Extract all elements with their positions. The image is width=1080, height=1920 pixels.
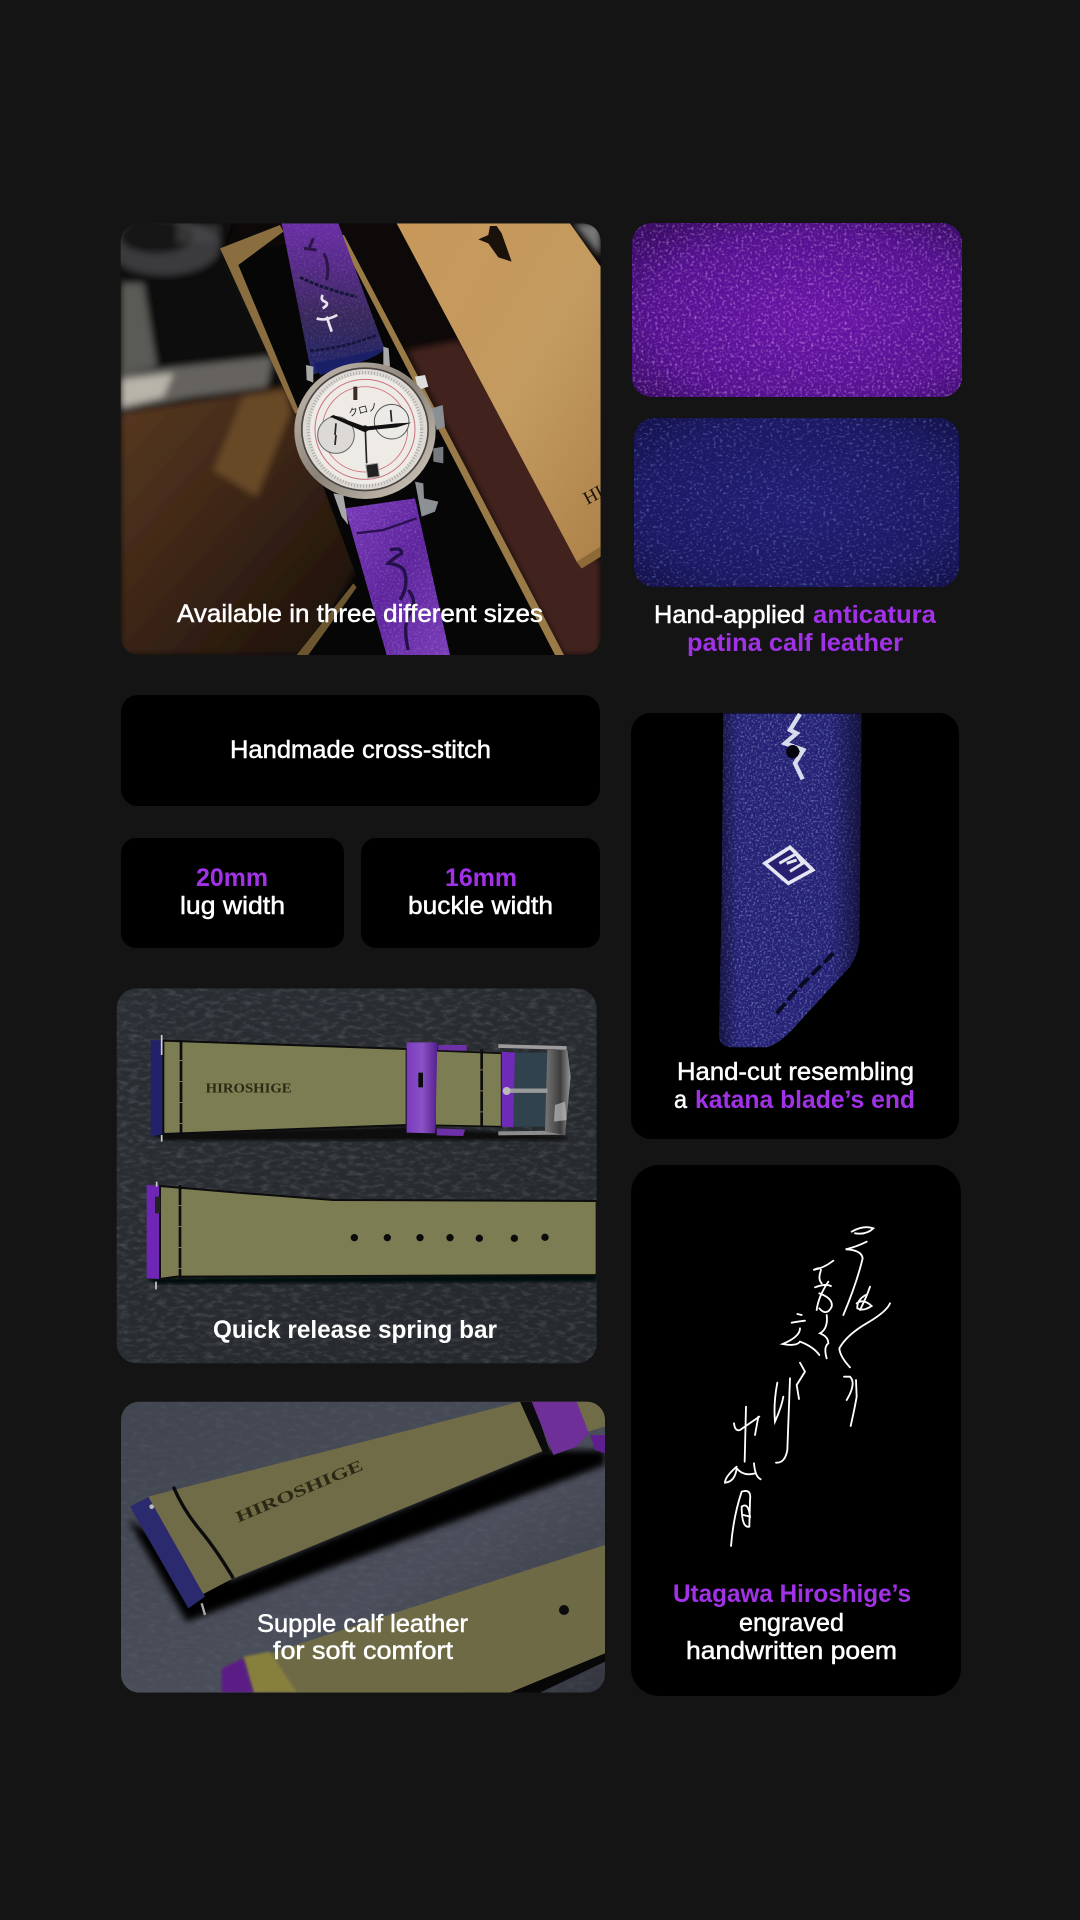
upper strap: HIROSHIGE	[206, 1080, 292, 1095]
caption: katana: a	[674, 1086, 687, 1114]
caption: patina: Hand-applied	[654, 601, 805, 629]
caption: patina: patina calf leather	[687, 629, 903, 657]
shadow	[128, 1450, 605, 1622]
photo: strap close-up: HIROSHIGE	[233, 1457, 366, 1526]
panel: lug width: lug width	[180, 892, 285, 920]
caption: soft comfort: Supple calf leather	[257, 1610, 468, 1638]
maker mark	[765, 847, 813, 883]
caption: patina: anticatura	[813, 601, 937, 629]
lower strap	[270, 1545, 605, 1693]
hands	[330, 415, 365, 432]
caption: katana	[674, 1058, 915, 1114]
caption: soft comfort: for soft comfort	[273, 1637, 453, 1665]
panel: handmade cross-stitch: Handmade cross-stitch	[230, 736, 491, 764]
caption: soft comfort	[257, 1610, 468, 1665]
panel: quick release spring bar	[117, 988, 597, 1363]
strap upper	[282, 223, 385, 375]
stitch	[777, 953, 833, 1013]
infographic canvas	[116, 223, 962, 1696]
photo: strap underside on slate	[117, 988, 597, 1363]
dial	[310, 374, 420, 484]
blurred surroundings	[107, 218, 601, 655]
upper strap	[130, 1496, 205, 1608]
strap lower	[345, 498, 450, 655]
panel: lug width	[121, 838, 344, 948]
buckle	[498, 1046, 567, 1048]
box print	[478, 226, 512, 262]
panel: leather swatches	[632, 223, 962, 657]
calligraphy: engraved poem strokes	[725, 1227, 890, 1546]
photo: strap close-up	[121, 1402, 605, 1693]
caption: spring bar: Quick release spring bar	[213, 1316, 497, 1344]
caption: Hiroshige poem: Utagawa Hiroshige’s	[673, 1580, 911, 1608]
caption: Hiroshige poem: engraved	[739, 1609, 844, 1637]
panel: buckle width: 16mm	[445, 864, 517, 892]
shadows	[150, 1127, 567, 1141]
swatch: purple leather	[632, 223, 962, 397]
panel: handmade cross-stitch	[121, 695, 600, 806]
panel: buckle width	[361, 838, 600, 948]
caption: Hiroshige poem	[673, 1580, 911, 1665]
caption: katana: katana blade’s end	[695, 1086, 915, 1114]
panel: handwritten poem	[631, 1165, 961, 1696]
panel: katana blade end	[631, 713, 959, 1139]
swatch: blue leather	[634, 418, 959, 587]
panel: watch photo	[107, 218, 607, 655]
panel: lug width: 20mm	[196, 864, 268, 892]
upper strap	[151, 1035, 571, 1142]
box interior and rim	[274, 352, 360, 655]
panel: buckle width: buckle width	[408, 892, 553, 920]
watch case	[294, 362, 436, 499]
photo: blue strap tip	[717, 713, 867, 1050]
caption: katana: Hand-cut resembling	[677, 1058, 914, 1086]
caption: patina	[654, 601, 937, 657]
photo: chronograph watch in box: クロノ	[347, 401, 379, 420]
panel: supple calf leather	[121, 1402, 605, 1693]
lower strap	[147, 1182, 597, 1289]
kraft box lid	[397, 223, 601, 568]
photo: chronograph watch in box: HI	[580, 482, 607, 509]
caption: Hiroshige poem: handwritten poem	[686, 1637, 897, 1665]
caption: sizes: Available in three different sizes	[177, 600, 543, 628]
lugs and pushers	[306, 347, 390, 525]
photo: chronograph watch in box	[107, 218, 607, 655]
